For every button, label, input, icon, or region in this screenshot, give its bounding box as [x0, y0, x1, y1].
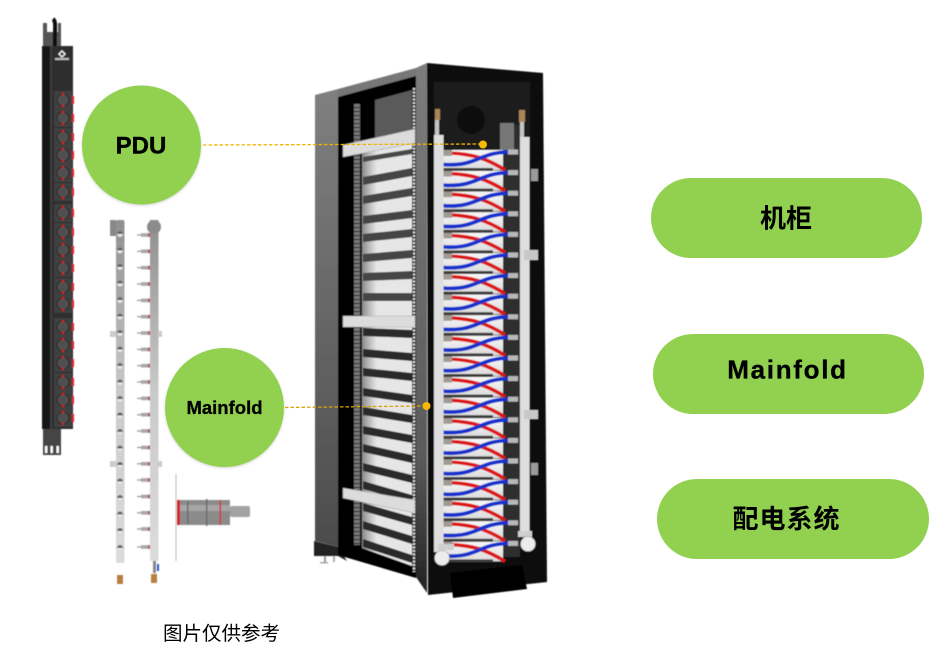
cabinet top edge — [338, 68, 416, 97]
cabinet side panel — [315, 89, 338, 547]
server cabinet — [314, 63, 547, 598]
bottom couplings — [434, 531, 536, 566]
quick connector detail — [176, 474, 250, 561]
cabinet base bracket — [450, 565, 527, 598]
Mainfold badge: Mainfold — [186, 397, 263, 418]
side view servers — [362, 142, 412, 566]
pill: Mainfold — [653, 334, 924, 414]
Mainfold leader line — [285, 402, 430, 410]
PDU outlets — [54, 91, 74, 427]
cabinet front post — [416, 63, 427, 593]
cabinet side opening — [338, 76, 416, 578]
manifold front view — [110, 220, 124, 584]
perforated strip — [413, 88, 415, 572]
cabinet front frame — [427, 63, 547, 595]
PDU bottom bracket — [43, 429, 61, 455]
caption: 图片仅供参考 — [163, 623, 280, 645]
pill: power distribution — [657, 479, 929, 559]
PDU leader line — [203, 140, 487, 148]
side mounting strip — [354, 104, 360, 545]
front left manifold — [434, 109, 444, 552]
PDU logo — [55, 51, 69, 60]
PDU badge — [82, 86, 201, 204]
PDU body — [42, 46, 73, 429]
liquid cooling rows — [443, 123, 520, 562]
side rails — [343, 129, 415, 513]
PDU power strip — [42, 19, 74, 455]
pill: cabinet: 机柜 — [760, 204, 812, 234]
leveling feet — [314, 541, 347, 564]
pill: cabinet — [651, 178, 922, 258]
PDU badge: PDU — [116, 132, 166, 160]
upper back panel — [375, 90, 412, 140]
front right manifold — [519, 110, 538, 537]
pill: power distribution: 配电系统 — [732, 504, 841, 534]
pill: Mainfold: Mainfold — [727, 354, 848, 384]
PDU top bracket and cable — [43, 19, 61, 46]
Mainfold badge — [165, 348, 284, 467]
manifold side view — [137, 220, 162, 583]
cabinet rear interior — [434, 82, 530, 152]
fan — [457, 106, 485, 134]
